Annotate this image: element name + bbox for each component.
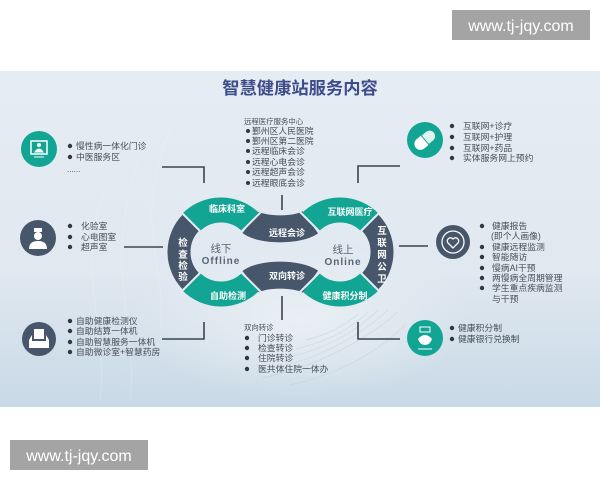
segment: 健康积分制: 健康积分制 <box>322 290 368 301</box>
label: online <box>324 243 362 268</box>
list: health management: 慢病AI干预 <box>492 262 536 273</box>
title: 智慧健康站服务内容 <box>222 78 378 98</box>
list: two-way referral: 医共体住院一体办 <box>258 363 329 374</box>
list: remote medical service center: 远程眼底会诊 <box>252 177 305 188</box>
segment: 临床科室 <box>191 203 251 222</box>
icon: doctor <box>20 220 56 256</box>
list: self service <box>68 315 161 357</box>
list: health management: 学生重点疾病监测 <box>492 282 563 293</box>
label: offline: Offline <box>202 256 240 267</box>
list: health management: 智能随访 <box>492 251 527 262</box>
segment: 互联网公卫: 互 <box>377 226 387 237</box>
list: chronic disease clinic <box>67 140 147 174</box>
list: chronic disease clinic: 中医服务区 <box>76 151 120 162</box>
label: online: 线上 <box>332 243 354 256</box>
list: two-way referral: 住院转诊 <box>258 352 293 363</box>
segment: 自助检测 <box>191 282 251 301</box>
segment: 检查检验: 查 <box>178 249 188 261</box>
list: lab rooms <box>68 220 116 252</box>
segment: 临床科室: 临床科室 <box>209 203 245 214</box>
icon: pill <box>407 122 443 158</box>
list: health management: 与干预 <box>492 294 519 304</box>
list: health management: (即个人画像) <box>491 230 541 241</box>
list: lab rooms: 心电图室 <box>81 231 116 242</box>
list: two-way referral: 双向转诊 <box>244 323 274 332</box>
list: remote medical service center: 远程超声会诊 <box>252 166 305 177</box>
list: chronic disease clinic: 慢性病一体化门诊 <box>76 140 147 151</box>
segment: 互联网医疗: 互联网医疗 <box>327 206 373 217</box>
segment: 双向转诊 <box>251 270 310 282</box>
watermark bottom left: www.tj-jqy.com <box>25 448 132 465</box>
list: chronic disease clinic: ...... <box>67 165 80 174</box>
segment: 健康积分制 <box>310 282 370 301</box>
list: lab rooms: 超声室 <box>81 241 108 252</box>
segment: 互联网公卫: 网 <box>377 250 387 261</box>
icon: heart cycle <box>436 225 470 259</box>
list: internet services: 互联网+诊疗 <box>463 120 512 131</box>
segment: 自助检测: 自助检测 <box>210 290 246 301</box>
list: lab rooms: 化验室 <box>81 220 108 231</box>
label: offline <box>202 242 240 267</box>
list: health management: 两慢病全周期管理 <box>492 272 563 283</box>
watermark bottom left <box>10 440 148 470</box>
list: internet services: 互联网+护理 <box>463 131 512 142</box>
icon: piggy bank train <box>407 320 443 356</box>
segment: 互联网公卫 <box>370 222 387 285</box>
list: health points: 健康银行兑换制 <box>458 333 520 344</box>
icon: inbox document <box>22 322 56 356</box>
list: health management: 健康远程监测 <box>492 241 545 252</box>
list: health points: 健康积分制 <box>458 322 502 333</box>
watermark top right: www.tj-jqy.com <box>467 18 574 35</box>
list: two-way referral: 门诊转诊 <box>258 332 293 343</box>
list: self service: 自助微诊室+智慧药房 <box>76 346 161 357</box>
list: self service: 自助健康检测仪 <box>76 315 138 326</box>
segment: 检查检验: 检 <box>178 260 188 272</box>
list: health management: 健康报告 <box>492 220 527 231</box>
list: remote medical service center: 鄞州区第二医院 <box>252 135 314 146</box>
list: self service: 自助智慧服务一体机 <box>76 336 155 347</box>
segment: 互联网医疗 <box>310 206 373 222</box>
list: remote medical service center <box>244 117 314 188</box>
list: remote medical service center: 远程心电会诊 <box>252 156 305 167</box>
segment: 远程会诊: 远程会诊 <box>269 227 305 238</box>
list: remote medical service center: 远程临床会诊 <box>252 145 305 156</box>
list: internet services: 实体服务网上预约 <box>463 152 534 163</box>
background band <box>0 71 600 407</box>
segment: 双向转诊: 双向转诊 <box>269 270 305 281</box>
segment: 互联网公卫: 联 <box>377 237 387 249</box>
list: remote medical service center: 鄞州区人民医院 <box>252 125 314 136</box>
segment: 检查检验: 验 <box>178 271 188 283</box>
list: internet services <box>450 120 534 163</box>
list: health points <box>450 322 520 344</box>
segment: 互联网公卫: 卫 <box>377 274 387 285</box>
segment: 检查检验 <box>178 222 191 283</box>
icon: online clinic monitor <box>21 131 57 167</box>
list: self service: 自助结算一体机 <box>76 325 138 336</box>
infinity diagram <box>178 203 387 301</box>
list: remote medical service center: 远程医疗服务中心 <box>244 117 304 126</box>
label: offline: 线下 <box>210 242 232 255</box>
list: internet services: 互联网+药品 <box>463 143 512 153</box>
segment: 互联网公卫: 公 <box>377 262 387 273</box>
label: online: Online <box>324 257 362 268</box>
list: two-way referral <box>244 323 329 374</box>
segment: 检查检验: 检 <box>178 237 188 249</box>
list: health management <box>480 220 563 304</box>
segment: 远程会诊 <box>251 222 310 238</box>
watermark top right <box>452 10 590 40</box>
list: two-way referral: 检查转诊 <box>258 342 293 353</box>
